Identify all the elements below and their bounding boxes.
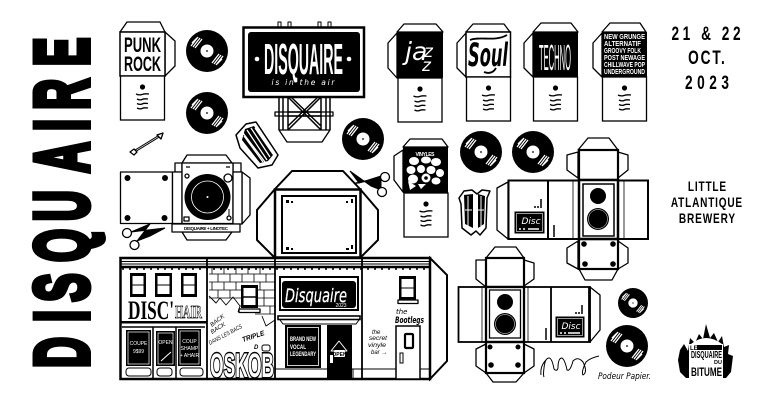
vinyl record [512,131,554,173]
sleeve: jazz: z [423,42,434,62]
shop: The Bootlegs door: the [396,308,408,316]
tonearm paper piece [236,122,278,168]
shop: Disc'Hair [121,273,207,379]
shop: Disc'Hair: SHAMP [181,346,199,352]
venue [671,178,742,226]
speaker paper net [458,247,600,382]
sleeve: punk rock: PUNK [124,34,161,57]
shop: Disquaire: 2023 [335,303,347,309]
vinyl record [342,118,384,160]
venue: LITTLE [688,178,726,194]
sleeve: genre list: CHILLWAVE POP [604,62,645,69]
shop: Disquaire: LEGENDARY [290,351,316,358]
sleeve: jazz [388,24,443,122]
vinyl record [606,325,648,367]
billboard [244,22,364,142]
sleeve: genre list: ALTERNATIF [604,41,642,48]
festival logo: DISQUAIRE [691,350,722,361]
shop: Disc'Hair: COUP [182,339,197,345]
sleeve: genre list: UNDERGROUND [604,69,645,76]
sleeve: flowers: VINYLES [416,152,435,158]
speaker paper net: Disc [521,217,541,227]
brick wall with graffiti: DANS LES BACS [208,324,244,347]
turntable paper net: DISQUAIRE + LINOTEC [184,226,229,231]
text: TECHNO [539,37,571,78]
sleeve: punk rock: ROCK [124,53,161,76]
vinyl record [186,92,228,134]
shop: Disc'Hair: 9$99 [133,349,144,355]
brick wall with graffiti: D [254,345,259,351]
speaker paper net [497,138,648,280]
title: DISQUAIRE vertical: DISQUAIRE [20,38,105,368]
festival logo: LE [690,346,698,352]
sleeve: genre list [593,23,647,121]
sleeve: jazz: ja [402,37,427,66]
shop: The Bootlegs door: secret [369,336,387,342]
sleeve: genre list: POST NEWAGE [604,55,645,62]
brick wall with graffiti: BACK [210,313,227,329]
shop: Disquaire: BRAND NEW [290,336,317,343]
brick wall with graffiti: BACK [210,321,228,336]
shop: Disc'Hair: HAIR [175,302,203,322]
shop: Disquaire: OPEN [332,352,347,358]
sleeve: punk rock [120,22,175,120]
building roof panel [257,171,378,258]
date: OCT. [688,47,725,69]
brick wall with graffiti [208,267,275,385]
festival logo: BITUME [691,365,722,379]
stylus needle [130,133,163,155]
shop: The Bootlegs door: bar → [371,350,387,356]
date: 21 & 22 [671,23,741,45]
sleeve: soul: Soul [468,36,509,74]
vinyl record small [618,288,648,318]
shop: Disc'Hair: DISC' [128,296,174,325]
tonearm paper piece [459,190,490,235]
vinyl record [460,131,502,173]
date [671,23,741,94]
date: 2023 [685,72,729,94]
cable [541,356,599,377]
sleeve: flowers [394,139,448,237]
scissors [350,171,390,196]
turntable paper net [120,155,250,240]
shop: The Bootlegs door [362,276,430,379]
speaker paper net: Disc [561,322,581,332]
shop: Disquaire [275,277,362,379]
shop: The Bootlegs door: vinyle [368,343,387,349]
signature: Podeur Papier. [598,372,651,382]
venue: ATLANTIQUE [671,194,742,210]
venue: BREWERY [679,210,735,226]
scissors [122,224,165,250]
shop: Disc'Hair: + AHAIR [180,353,200,359]
shop: The Bootlegs door: the [372,330,381,336]
shop: The Bootlegs door: Bootlegs [395,316,424,326]
billboard: is in the air [272,78,335,87]
brick wall with graffiti: OSKOB [210,347,274,385]
sleeve: techno [524,23,578,121]
sleeve: genre list: NEW GRUNGE [604,34,645,41]
sleeve: genre list: GROOVY FOLK [604,48,641,55]
building facade [120,258,447,385]
shop: Disquaire: VOCAL [290,344,306,351]
shop: Disc'Hair: OPEN [158,340,173,346]
sleeve: soul [457,24,510,121]
festival logo [678,324,733,379]
shop: Disquaire: Disquaire [285,285,347,307]
vinyl record [186,30,228,72]
festival logo: DU [714,360,722,366]
brick wall with graffiti: TRIPLE [241,330,266,344]
shop: Disc'Hair: COUPE [130,341,148,347]
text: DISQUAIRE [264,35,343,84]
sleeve: jazz: z [421,56,432,76]
